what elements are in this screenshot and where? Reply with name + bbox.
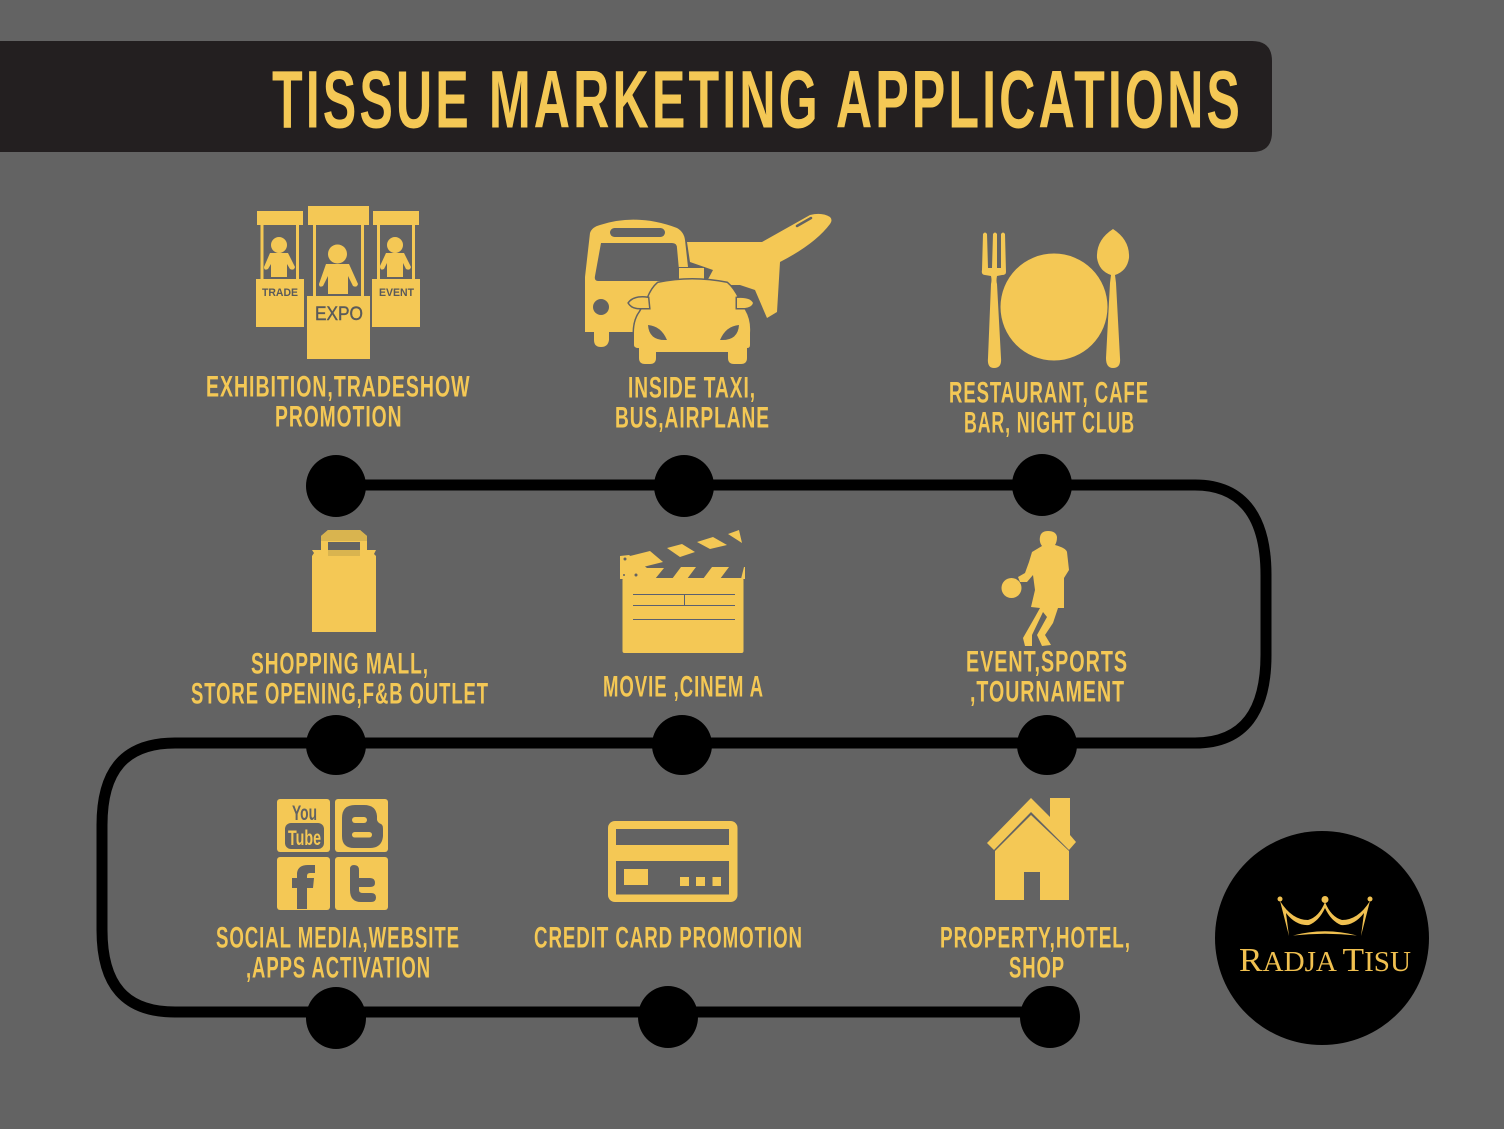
icon: plate, fork and spoon xyxy=(982,229,1129,368)
label: sports: EVENT,SPORTS xyxy=(966,646,1128,678)
icon: exhibition booths xyxy=(256,206,420,359)
label: credit card: CREDIT CARD PROMOTION xyxy=(534,922,803,954)
label: shopping xyxy=(191,648,489,710)
label: property: SHOP xyxy=(1009,952,1065,984)
label: exhibition: EXHIBITION,TRADESHOW xyxy=(206,370,470,404)
label: restaurant xyxy=(949,376,1149,440)
label: sports xyxy=(966,646,1128,708)
label: transport xyxy=(615,372,770,434)
label: exhibition: PROMOTION xyxy=(275,400,402,434)
icon: house xyxy=(987,798,1076,900)
label: exhibition xyxy=(206,370,470,434)
label: social media: ,APPS ACTIVATION xyxy=(246,952,431,984)
logo: Radja Tisu: RADJA TISU xyxy=(1239,942,1411,979)
label: movie: MOVIE ,CINEM A xyxy=(603,670,764,704)
icon: social media tiles: You xyxy=(292,802,317,825)
icon: exhibition booths: EXPO xyxy=(315,304,363,325)
icon: crown xyxy=(1278,896,1372,936)
label: restaurant: BAR, NIGHT CLUB xyxy=(964,406,1135,440)
timeline path with nodes xyxy=(102,454,1266,1049)
icon: exhibition booths: EVENT xyxy=(379,287,414,299)
label: transport: INSIDE TAXI, xyxy=(628,372,756,404)
label: transport: BUS,AIRPLANE xyxy=(615,402,770,434)
label: sports: ,TOURNAMENT xyxy=(970,676,1125,708)
label: property xyxy=(940,922,1131,984)
icon: exhibition booths: TRADE xyxy=(262,287,298,299)
label: restaurant: RESTAURANT, CAFE xyxy=(949,376,1149,410)
label: social media: SOCIAL MEDIA,WEBSITE xyxy=(216,922,460,954)
icon: film clapperboard xyxy=(620,530,745,653)
label: shopping: SHOPPING MALL, xyxy=(251,648,429,680)
icon: shopping bag xyxy=(312,530,376,632)
title banner xyxy=(0,41,1272,152)
icon: bus, taxi and airplane xyxy=(585,214,832,364)
icon: basketball player xyxy=(1002,531,1069,646)
icon: credit card xyxy=(608,821,738,902)
label: shopping: STORE OPENING,F&B OUTLET xyxy=(191,678,489,710)
label: property: PROPERTY,HOTEL, xyxy=(940,922,1131,954)
label: social media xyxy=(216,922,460,984)
icon: social media tiles: Tube xyxy=(288,827,321,850)
logo: Radja Tisu xyxy=(1215,831,1429,1045)
taxi body xyxy=(629,280,753,364)
icon: social media tiles xyxy=(277,799,388,910)
